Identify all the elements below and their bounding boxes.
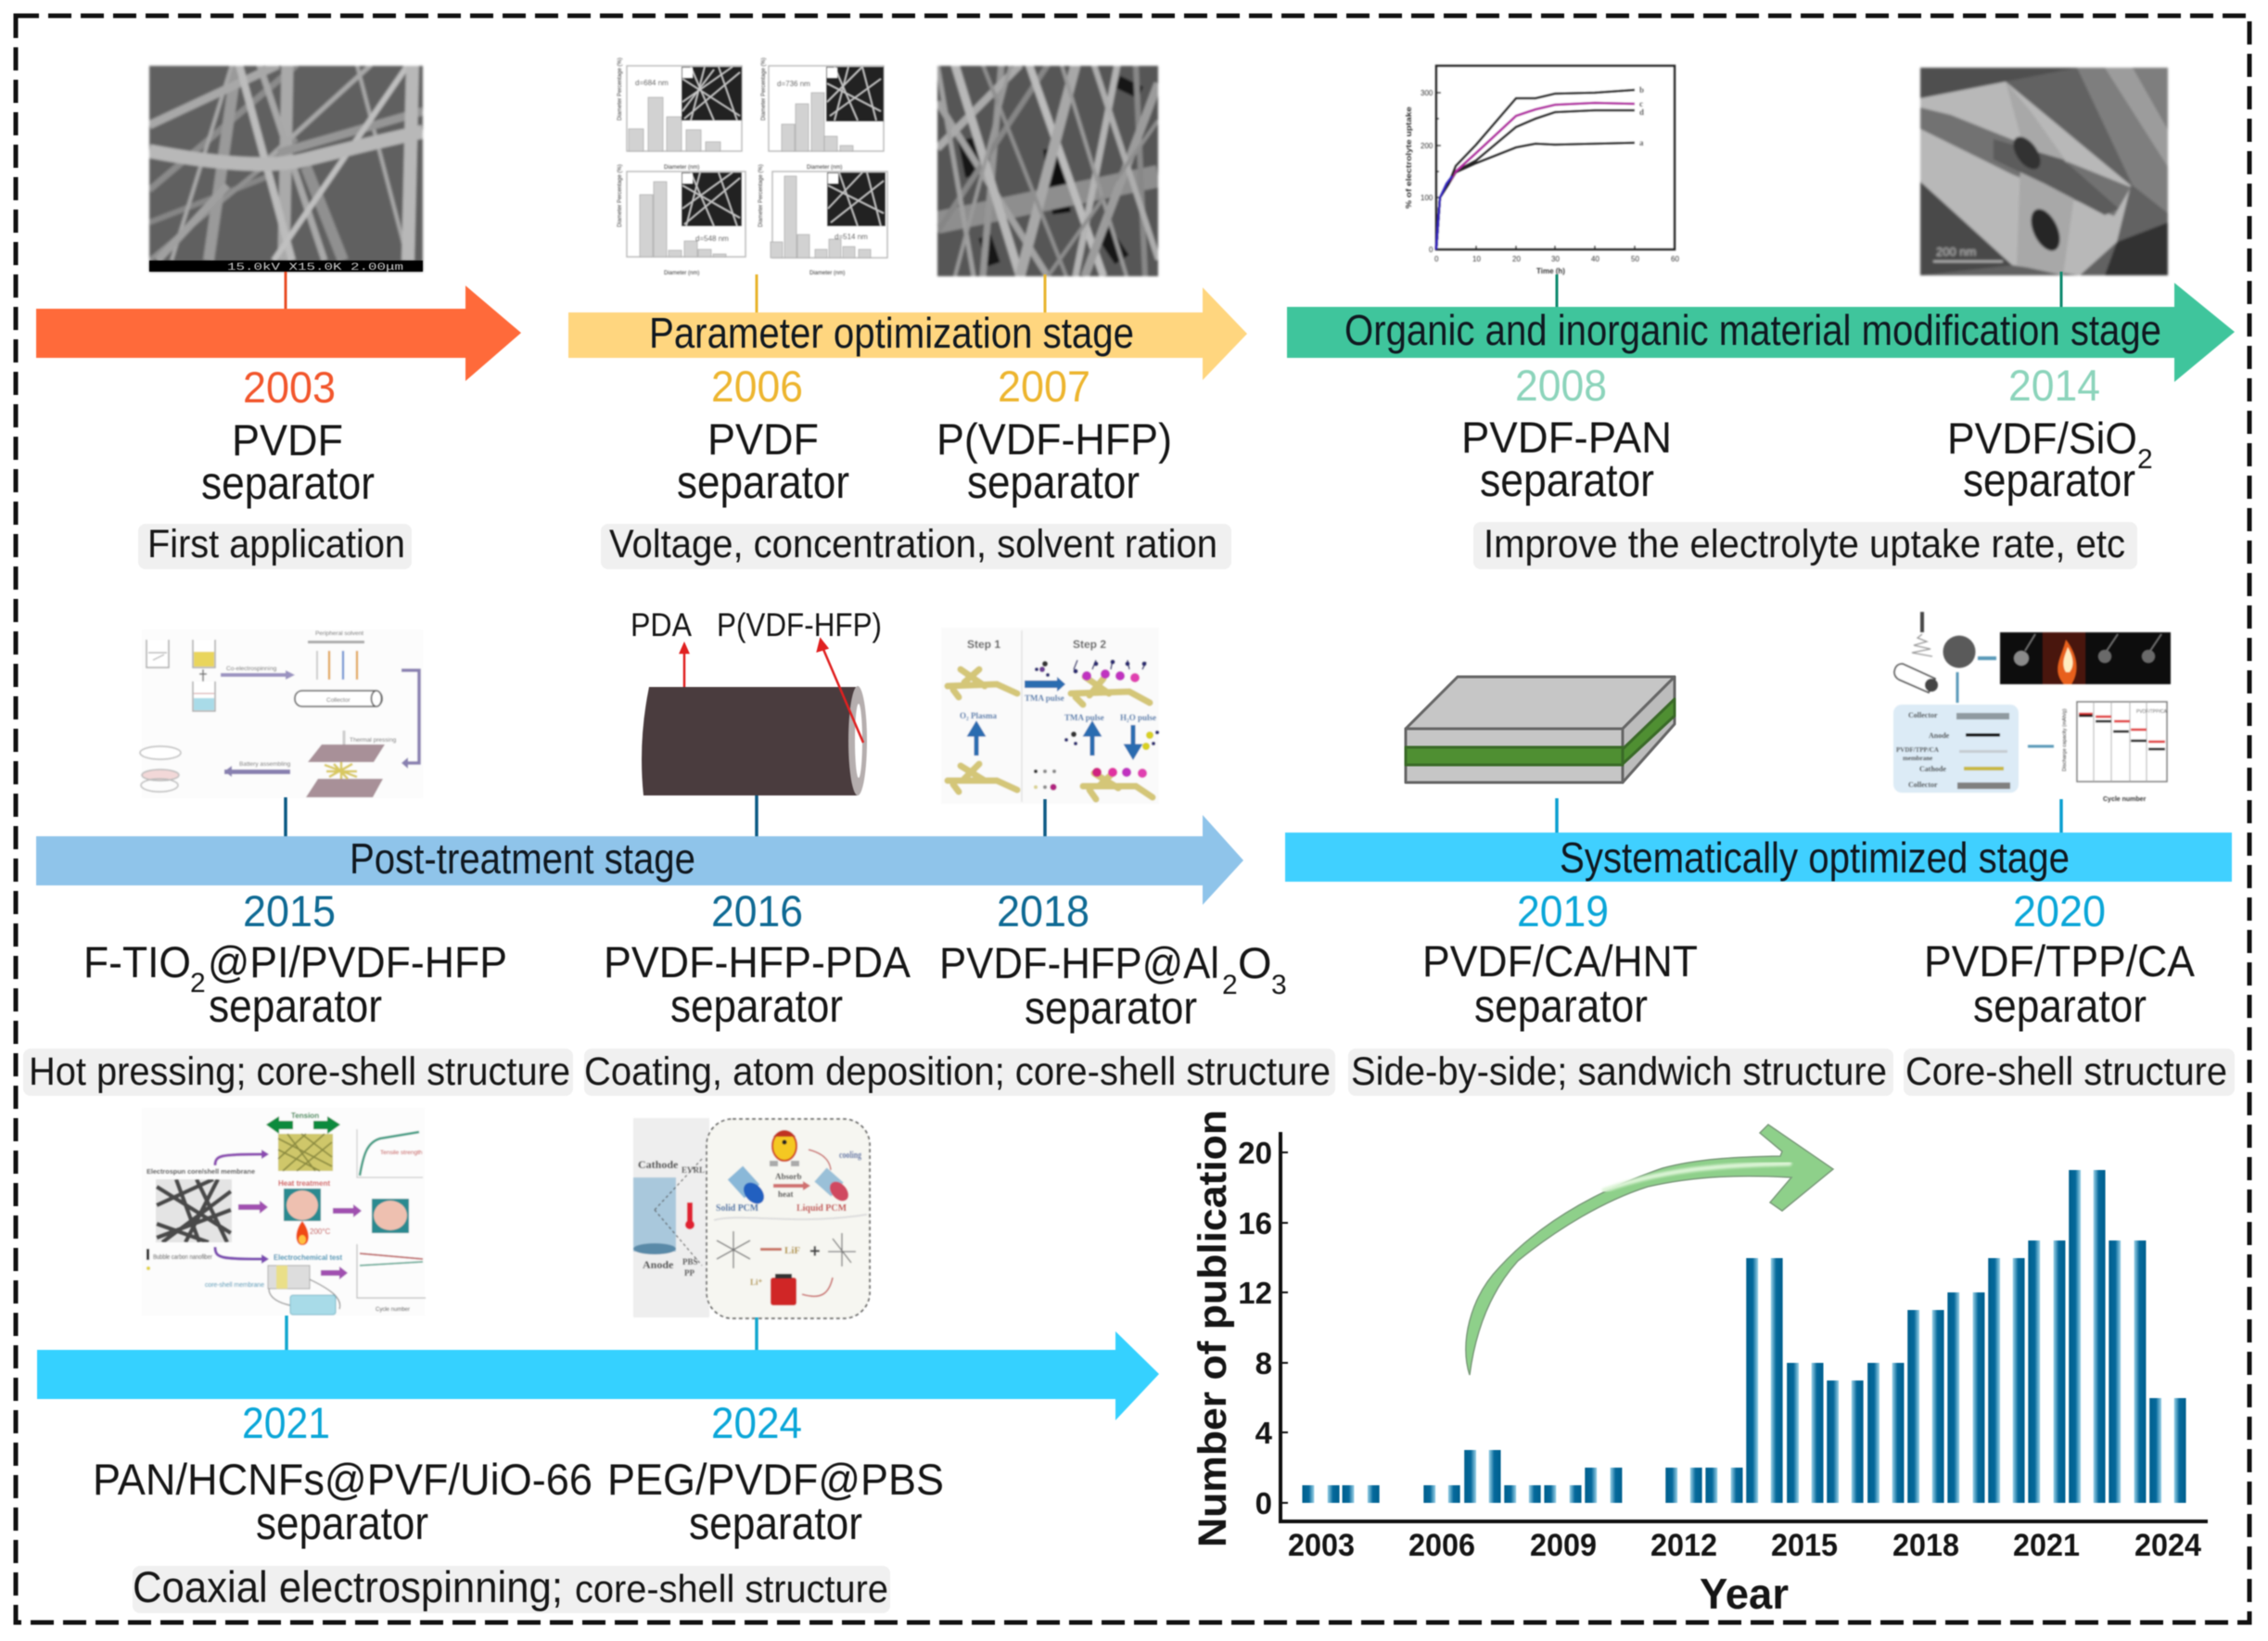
electrolyte uptake chart 2008: Time (h) <box>1536 267 1565 275</box>
phase-change material figure 2024: Li⁺ <box>750 1278 763 1287</box>
separator: separator <box>1480 454 1654 506</box>
phase-change material figure 2024: Cathode <box>638 1158 679 1171</box>
flame retardant figure 2020: Cathode <box>1919 765 1946 773</box>
connector 2006 <box>755 274 758 314</box>
core-shell membrane figure 2021: Electrochemical test <box>274 1253 342 1262</box>
axes <box>1281 1132 2208 1521</box>
TEM image 2014 <box>1920 68 2168 275</box>
phase-change material figure 2024: PBS <box>682 1257 698 1266</box>
SEM image 2007 <box>937 65 1158 276</box>
arrow modification stage <box>1287 283 2235 382</box>
flame retardant figure 2020: Anode <box>1929 731 1950 740</box>
stage title parameter optimization: Parameter optimization stage <box>649 309 1134 357</box>
phase-change material figure 2024: EVRL <box>682 1165 705 1175</box>
material PVDF/SiO2: 2 <box>2137 444 2153 475</box>
material P(VDF-HFP): P(VDF-HFP) <box>937 414 1172 464</box>
histogram grid 2006: Diameter Percentage (%) <box>618 164 623 227</box>
flame retardant figure 2020: PVDF/TPP/CA <box>1896 746 1939 754</box>
year 2003: 2003 <box>243 363 336 412</box>
note pill: hot pressing: Hot pressing; core-shell structure <box>29 1049 570 1094</box>
material PVDF-PAN: PVDF-PAN <box>1461 413 1672 462</box>
material PVDF-HFP@Al2O3: 3 <box>1271 970 1287 1000</box>
schematic 2015: Collector <box>326 697 350 704</box>
bars <box>1302 1170 2186 1503</box>
flame retardant figure 2020 <box>1893 612 2171 803</box>
y axis labels: 16 <box>1238 1206 1272 1240</box>
material F-TIO2@PI/PVDF-HFP <box>83 937 507 999</box>
histogram grid 2006: d=514 nm <box>835 233 868 241</box>
histogram grid 2006: Diameter (nm) <box>809 271 845 276</box>
bar systematically optimized <box>1285 833 2232 882</box>
y ticks <box>1281 1152 1288 1503</box>
note pill: coaxial electrospinning: core-shell structure <box>575 1567 888 1610</box>
flame retardant figure 2020: membrane <box>1903 755 1932 762</box>
material PVDF-HFP@Al2O3: O <box>1238 938 1272 987</box>
electrolyte uptake chart 2008 <box>1405 66 1679 275</box>
material PVDF/SiO2: PVDF/SiO <box>1947 413 2137 463</box>
panel: parameter optimization stage <box>568 57 1247 569</box>
stage title systematic: Systematically optimized stage <box>1560 833 2070 882</box>
y axis labels: 0 <box>1255 1486 1272 1520</box>
arrow latest stage <box>37 1331 1159 1420</box>
material PVDF: PVDF <box>707 414 819 464</box>
connector 2015 <box>284 797 287 838</box>
material PVDF-HFP@Al2O3: 2 <box>1222 970 1238 1000</box>
year 2019: 2019 <box>1517 886 1609 935</box>
year 2020: 2020 <box>2013 886 2106 935</box>
electrolyte uptake chart 2008: 200 <box>1421 142 1433 150</box>
x axis labels: 2015 <box>1771 1528 1838 1563</box>
separator: separator <box>1025 982 1197 1034</box>
flame retardant figure 2020: Discharge capacity (mAh/g) <box>2062 708 2068 771</box>
flame retardant figure 2020: Collector <box>1908 711 1938 719</box>
core-shell membrane figure 2021 <box>142 1108 426 1316</box>
electrolyte uptake chart 2008: d <box>1639 108 1644 117</box>
electrolyte uptake chart 2008: 100 <box>1421 194 1433 202</box>
connector 2007 <box>1044 274 1046 314</box>
material PEG/PVDF@PBS: PEG/PVDF@PBS <box>607 1455 944 1504</box>
year 2006: 2006 <box>711 362 803 411</box>
electrolyte uptake chart 2008: 0 <box>1429 246 1433 254</box>
histogram grid 2006: Diameter (nm) <box>664 165 699 171</box>
core-shell membrane figure 2021: core-shell membrane <box>205 1282 264 1289</box>
separator: separator <box>670 980 843 1032</box>
connector 2021 <box>285 1316 288 1352</box>
histogram grid 2006: d=684 nm <box>635 79 669 87</box>
material name PVDF: PVDF <box>232 415 343 464</box>
material PVDF/CA/HNT: PVDF/CA/HNT <box>1422 936 1698 986</box>
separator: separator <box>1963 454 2135 506</box>
electrolyte uptake chart 2008: 30 <box>1551 255 1560 263</box>
flame retardant figure 2020: Collector <box>1908 781 1938 789</box>
phase-change material figure 2024: Solid PCM <box>716 1203 759 1214</box>
atomic layer deposition figure 2018 <box>941 628 1159 804</box>
material PVDF-HFP@Al2O3 <box>939 938 1287 1000</box>
stage title post-treatment: Post-treatment stage <box>350 834 695 883</box>
schematic 2015: Thermal pressing <box>350 737 397 744</box>
phase-change material figure 2024: + <box>809 1241 821 1262</box>
arrow post-treatment <box>36 815 1243 905</box>
flame retardant figure 2020: Cycle number <box>2103 796 2147 803</box>
histogram grid 2006: Diameter Percentage (%) <box>618 57 623 121</box>
flame retardant figure 2020: PVDF/TPP/CA <box>2136 709 2167 715</box>
electrolyte uptake chart 2008: 300 <box>1421 89 1433 97</box>
x axis labels: 2003 <box>1288 1528 1355 1563</box>
PDA coated fibre 2016 <box>631 607 882 795</box>
panel: first application stage 2003 <box>36 65 521 569</box>
electrolyte uptake chart 2008: % of electrolyte uptake <box>1405 106 1413 209</box>
connector 2018 <box>1043 799 1047 838</box>
SEM image 2003 <box>149 65 423 272</box>
note pill: first application: First application <box>147 522 405 566</box>
x axis labels: 2018 <box>1892 1528 1959 1563</box>
core-shell membrane figure 2021: Heat treatment <box>278 1179 330 1188</box>
x axis labels <box>1288 1528 2201 1563</box>
histogram grid 2006: d=736 nm <box>777 80 810 88</box>
core-shell membrane figure 2021: 200°C <box>310 1228 331 1236</box>
histogram grid 2006: d=548 nm <box>695 235 729 243</box>
year 2007: 2007 <box>998 362 1090 411</box>
note pill: voltage: Voltage, concentration, solvent ration <box>609 522 1217 566</box>
x axis labels: 2024 <box>2134 1528 2201 1563</box>
connector 2024 <box>755 1317 758 1352</box>
separator: separator <box>967 456 1140 508</box>
histogram grid 2006: Diameter Percentage (%) <box>761 57 767 121</box>
x axis labels: 2006 <box>1408 1528 1475 1563</box>
label P(VDF-HFP): P(VDF-HFP) <box>717 607 882 643</box>
connector 2003 <box>284 272 287 311</box>
connector 2014 <box>2060 272 2062 309</box>
electrolyte uptake chart 2008: 20 <box>1512 255 1521 263</box>
sandwich structure 2019 <box>1406 677 1675 782</box>
connector 2020 <box>2059 799 2063 834</box>
separator label: separator <box>201 457 375 509</box>
x axis labels: 2012 <box>1650 1528 1717 1563</box>
connector 2019 <box>1555 798 1559 834</box>
TEM image 2014: 200 nm <box>1936 245 1976 259</box>
phase-change material figure 2024: Liquid PCM <box>796 1203 847 1214</box>
year 2008: 2008 <box>1515 361 1607 410</box>
material F-TIO2@PI/PVDF-HFP: F-TIO <box>83 937 191 986</box>
note pill: side-by-side: Side-by-side; sandwich structure <box>1351 1049 1887 1094</box>
x axis labels: 2021 <box>2013 1528 2080 1563</box>
y axis title: Number of publication <box>1191 1110 1235 1547</box>
year 2024: 2024 <box>711 1398 802 1447</box>
arrow 2003 <box>36 286 521 381</box>
panel: post-treatment stage <box>23 607 1335 1096</box>
phase-change material figure 2024 <box>633 1118 870 1318</box>
year 2018: 2018 <box>997 886 1089 935</box>
x axis title: Year <box>1700 1570 1789 1618</box>
histogram grid 2006: Diameter (nm) <box>664 271 699 276</box>
phase-change material figure 2024: Anode <box>643 1258 674 1271</box>
note pill: core-shell: Core-shell structure <box>1905 1049 2227 1094</box>
histogram grid 2006: Diameter (nm) <box>807 165 842 171</box>
separator: separator <box>209 980 382 1032</box>
electrolyte uptake chart 2008: c <box>1639 99 1643 108</box>
electrolyte uptake chart 2008: 60 <box>1671 255 1679 263</box>
electrolyte uptake chart 2008: a <box>1639 138 1644 147</box>
panel: systematically optimized stage <box>1285 612 2235 1096</box>
material PVDF-HFP-PDA: PVDF-HFP-PDA <box>604 937 911 986</box>
y axis labels: 12 <box>1238 1276 1272 1310</box>
core-shell membrane figure 2021: Tension <box>291 1112 319 1120</box>
connector 2008 <box>1556 274 1558 309</box>
note pill: coaxial electrospinning <box>133 1562 890 1613</box>
bar chart: number of publications <box>1191 1110 2208 1618</box>
material F-TIO2@PI/PVDF-HFP: @PI/PVDF-HFP <box>208 937 507 986</box>
schematic 2015: Co-electrospinning <box>226 666 277 672</box>
core-shell membrane figure 2021: Electrospun core/shell membrane <box>147 1167 255 1176</box>
green growth arrow <box>1466 1125 1833 1375</box>
material PVDF-HFP@Al2O3: PVDF-HFP@Al <box>939 938 1219 987</box>
schematic 2015: Battery assembling <box>239 761 291 768</box>
core-shell membrane figure 2021: Tensile strength <box>380 1150 423 1156</box>
SEM caption: 15.0kV X15.0K 2.00μm <box>227 262 404 274</box>
year 2015: 2015 <box>243 886 336 935</box>
x axis labels: 2009 <box>1530 1528 1597 1563</box>
separator: separator <box>1474 980 1648 1032</box>
separator: separator <box>1973 980 2147 1032</box>
atomic layer deposition figure 2018: Step 2 <box>1073 638 1106 651</box>
schematic 2015: Peripheral solvent <box>315 630 363 637</box>
year 2014: 2014 <box>2008 361 2100 410</box>
year 2016: 2016 <box>711 886 803 935</box>
phase-change material figure 2024: heat <box>778 1189 794 1199</box>
phase-change material figure 2024: cooling <box>839 1151 861 1161</box>
panel: organic and inorganic modification stage <box>1287 66 2235 569</box>
histogram grid 2006 <box>618 57 887 276</box>
red pointer PDA <box>681 644 688 687</box>
SEM scale bar <box>149 261 423 272</box>
note pill: coating: Coating, atom deposition; core-shell structure <box>584 1049 1331 1094</box>
arrow parameter optimization <box>568 287 1247 380</box>
core-shell membrane figure 2021: Cycle number <box>376 1307 410 1313</box>
y axis labels: 4 <box>1255 1416 1273 1450</box>
material F-TIO2@PI/PVDF-HFP: 2 <box>190 968 206 999</box>
core-shell membrane figure 2021: Bubble carbon nanofiber <box>153 1254 213 1261</box>
stage title modification: Organic and inorganic material modification stage <box>1344 306 2161 354</box>
label PDA: PDA <box>631 607 693 643</box>
note pill: electrolyte uptake: Improve the electrolyte uptake rate, etc <box>1484 522 2125 566</box>
connector 2016 <box>755 795 758 838</box>
electrolyte uptake chart 2008: 0 <box>1434 255 1439 263</box>
electrolyte uptake chart 2008: 10 <box>1472 255 1481 263</box>
schematic 2015 <box>140 630 423 798</box>
y axis labels <box>1238 1136 1273 1520</box>
electrolyte uptake chart 2008: b <box>1639 85 1644 95</box>
electrolyte uptake chart 2008: 50 <box>1631 255 1639 263</box>
red pointer P(VDF-HFP) <box>818 640 863 743</box>
note pill: coaxial electrospinning: Coaxial electrospinning; <box>133 1562 563 1611</box>
year 2021: 2021 <box>242 1398 330 1447</box>
atomic layer deposition figure 2018: TMA pulse <box>1025 693 1064 703</box>
phase-change material figure 2024: PP <box>684 1268 694 1278</box>
histogram grid 2006: Diameter Percentage (%) <box>758 164 764 227</box>
phase-change material figure 2024: LiF <box>784 1245 800 1256</box>
material PAN/HCNFs@PVF/UiO-66: PAN/HCNFs@PVF/UiO-66 <box>93 1455 592 1504</box>
separator: separator <box>689 1497 862 1549</box>
separator: separator <box>256 1497 428 1549</box>
y axis labels: 8 <box>1255 1346 1272 1380</box>
atomic layer deposition figure 2018: H₂O pulse <box>1120 713 1156 722</box>
material PVDF/TPP/CA: PVDF/TPP/CA <box>1924 936 2196 986</box>
phase-change material figure 2024: Absorb <box>775 1172 802 1181</box>
panel: latest stage 2021-2024 <box>37 1108 1159 1613</box>
electrolyte uptake chart 2008: 40 <box>1591 255 1599 263</box>
atomic layer deposition figure 2018: Step 1 <box>967 638 1000 651</box>
atomic layer deposition figure 2018: TMA pulse <box>1064 713 1104 722</box>
separator: separator <box>677 456 849 508</box>
y axis labels: 20 <box>1238 1136 1272 1170</box>
atomic layer deposition figure 2018: O₂ Plasma <box>960 711 997 720</box>
